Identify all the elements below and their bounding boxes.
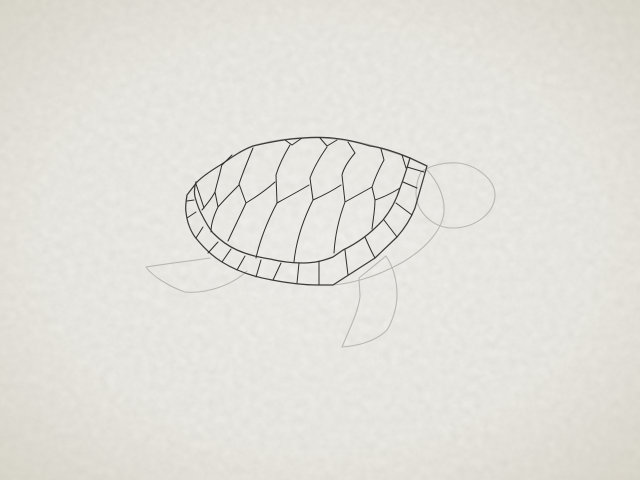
top edge scutes	[196, 138, 337, 208]
shell drawing	[186, 137, 427, 285]
marginal scutes	[187, 167, 424, 285]
body curve	[333, 170, 444, 285]
shell outer outline	[186, 137, 427, 285]
shell inner ring	[194, 158, 410, 263]
front flipper	[342, 256, 397, 347]
shell top edge highlight	[253, 138, 410, 158]
central scutes	[202, 142, 406, 262]
gray construction outlines: head, body, flippers	[146, 163, 495, 347]
rear flipper	[146, 258, 247, 292]
head outline	[416, 163, 495, 228]
